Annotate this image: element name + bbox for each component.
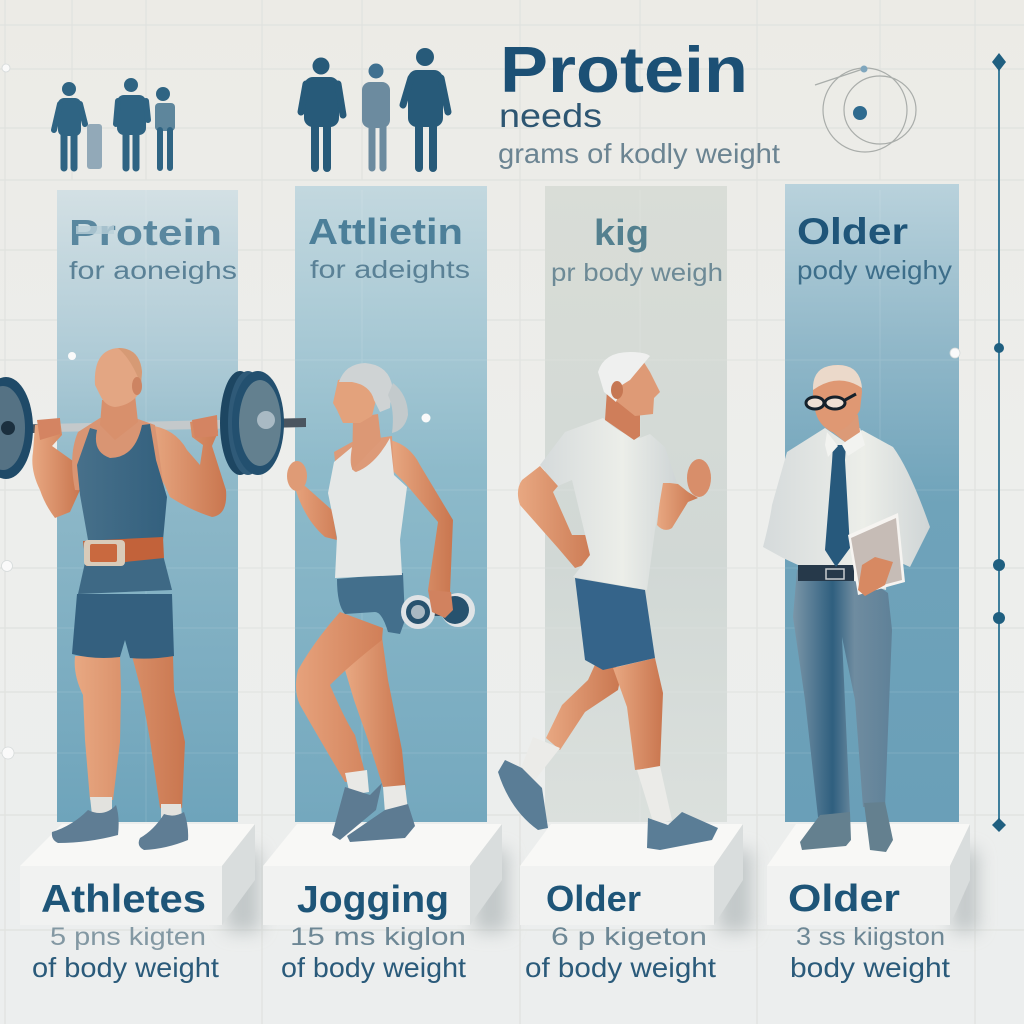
label: older 1: Older [546, 878, 641, 919]
neck and head [605, 390, 640, 440]
panel: column 3 [545, 186, 727, 822]
label: athletes: Athletes [41, 878, 206, 921]
far arm [295, 486, 337, 540]
gripping hands [37, 415, 218, 440]
neck and head [830, 415, 860, 442]
folder [848, 513, 905, 595]
label: older 1 [525, 878, 716, 983]
column 2 heading: Attlietin [308, 211, 463, 252]
label: older 2 [788, 878, 950, 983]
label: athletes: 5 pns kigten [50, 923, 206, 951]
shirt [540, 418, 677, 590]
icon: people group 2 [301, 48, 448, 168]
decorative dots [2, 64, 960, 759]
socks [521, 737, 672, 825]
dumbbell [401, 590, 475, 629]
shorts [575, 578, 655, 670]
label: older 2: Older [788, 878, 900, 920]
glasses [806, 394, 856, 409]
title: needs [499, 97, 602, 134]
belt [83, 537, 164, 566]
trousers [793, 570, 892, 817]
title: grams of kodly weight [498, 138, 780, 169]
arms [32, 419, 80, 518]
chest and shoulder [72, 418, 165, 495]
figure: jogging woman [287, 363, 475, 842]
front leg [613, 658, 663, 770]
legs [75, 656, 185, 808]
column 4 heading: Older [797, 211, 908, 252]
barbell [0, 371, 306, 479]
tank hem [78, 555, 172, 594]
shoes [498, 760, 718, 850]
front leg [296, 612, 383, 782]
label: jogging: 15 ms kiglon [290, 923, 466, 951]
pedestal shadows [226, 850, 978, 932]
shoes [332, 783, 415, 842]
belt [798, 565, 854, 581]
label: older 1: of body weight [525, 952, 716, 983]
neck and head [352, 414, 381, 470]
column 2 heading: for adeights [310, 256, 470, 284]
shorts [72, 594, 174, 659]
label: jogging: Jogging [297, 879, 449, 921]
collar [825, 428, 865, 457]
figure: older jogger [498, 352, 718, 850]
tie [825, 445, 850, 567]
front arm [657, 482, 698, 530]
pedestal 4 [767, 824, 970, 925]
column 3 heading: pr body weigh [551, 259, 723, 287]
column 1 heading [69, 212, 237, 285]
shoes [800, 802, 893, 852]
socks [345, 770, 408, 813]
label: older 1: 6 p kigeton [551, 923, 707, 951]
figure: weightlifter [0, 348, 306, 850]
icon: people group 1 [54, 78, 175, 169]
hand [858, 557, 893, 596]
neck and head [100, 395, 138, 440]
panel: column 4 [785, 184, 959, 822]
pedestal 2 [263, 824, 502, 925]
column 4 heading: pody weighy [797, 255, 952, 285]
socks [90, 797, 182, 818]
icon: circle diagram [815, 66, 916, 152]
back leg [345, 637, 406, 790]
label: jogging: of body weight [281, 952, 466, 983]
near arm [390, 440, 453, 593]
chest [334, 436, 394, 480]
column 1 heading: Protein [69, 212, 222, 253]
column 1 heading: for aoneighs [69, 257, 237, 285]
label: older 2: body weight [790, 952, 950, 983]
label: athletes [32, 878, 219, 983]
back arm [518, 466, 602, 568]
pedestal 3 [520, 824, 743, 925]
title: Protein [500, 33, 748, 106]
column 4 heading [797, 211, 952, 285]
tank [77, 424, 167, 540]
panel: column 2 [295, 186, 487, 822]
title [498, 33, 780, 169]
figure: older man [763, 365, 930, 852]
label: jogging [281, 879, 466, 983]
panel: column 1 [57, 190, 238, 822]
column 3 heading [551, 212, 723, 287]
shirt [763, 428, 930, 590]
shorts [337, 573, 405, 634]
column 2 heading [308, 211, 470, 284]
pedestal 1 [20, 824, 255, 925]
back leg [546, 658, 622, 750]
label: older 2: 3 ss kiigston [796, 923, 945, 951]
column 3 heading: kig [594, 212, 649, 253]
timeline: right axis [992, 53, 1006, 832]
label: athletes: of body weight [32, 952, 219, 983]
tank top [328, 438, 407, 578]
shoes [52, 805, 188, 850]
